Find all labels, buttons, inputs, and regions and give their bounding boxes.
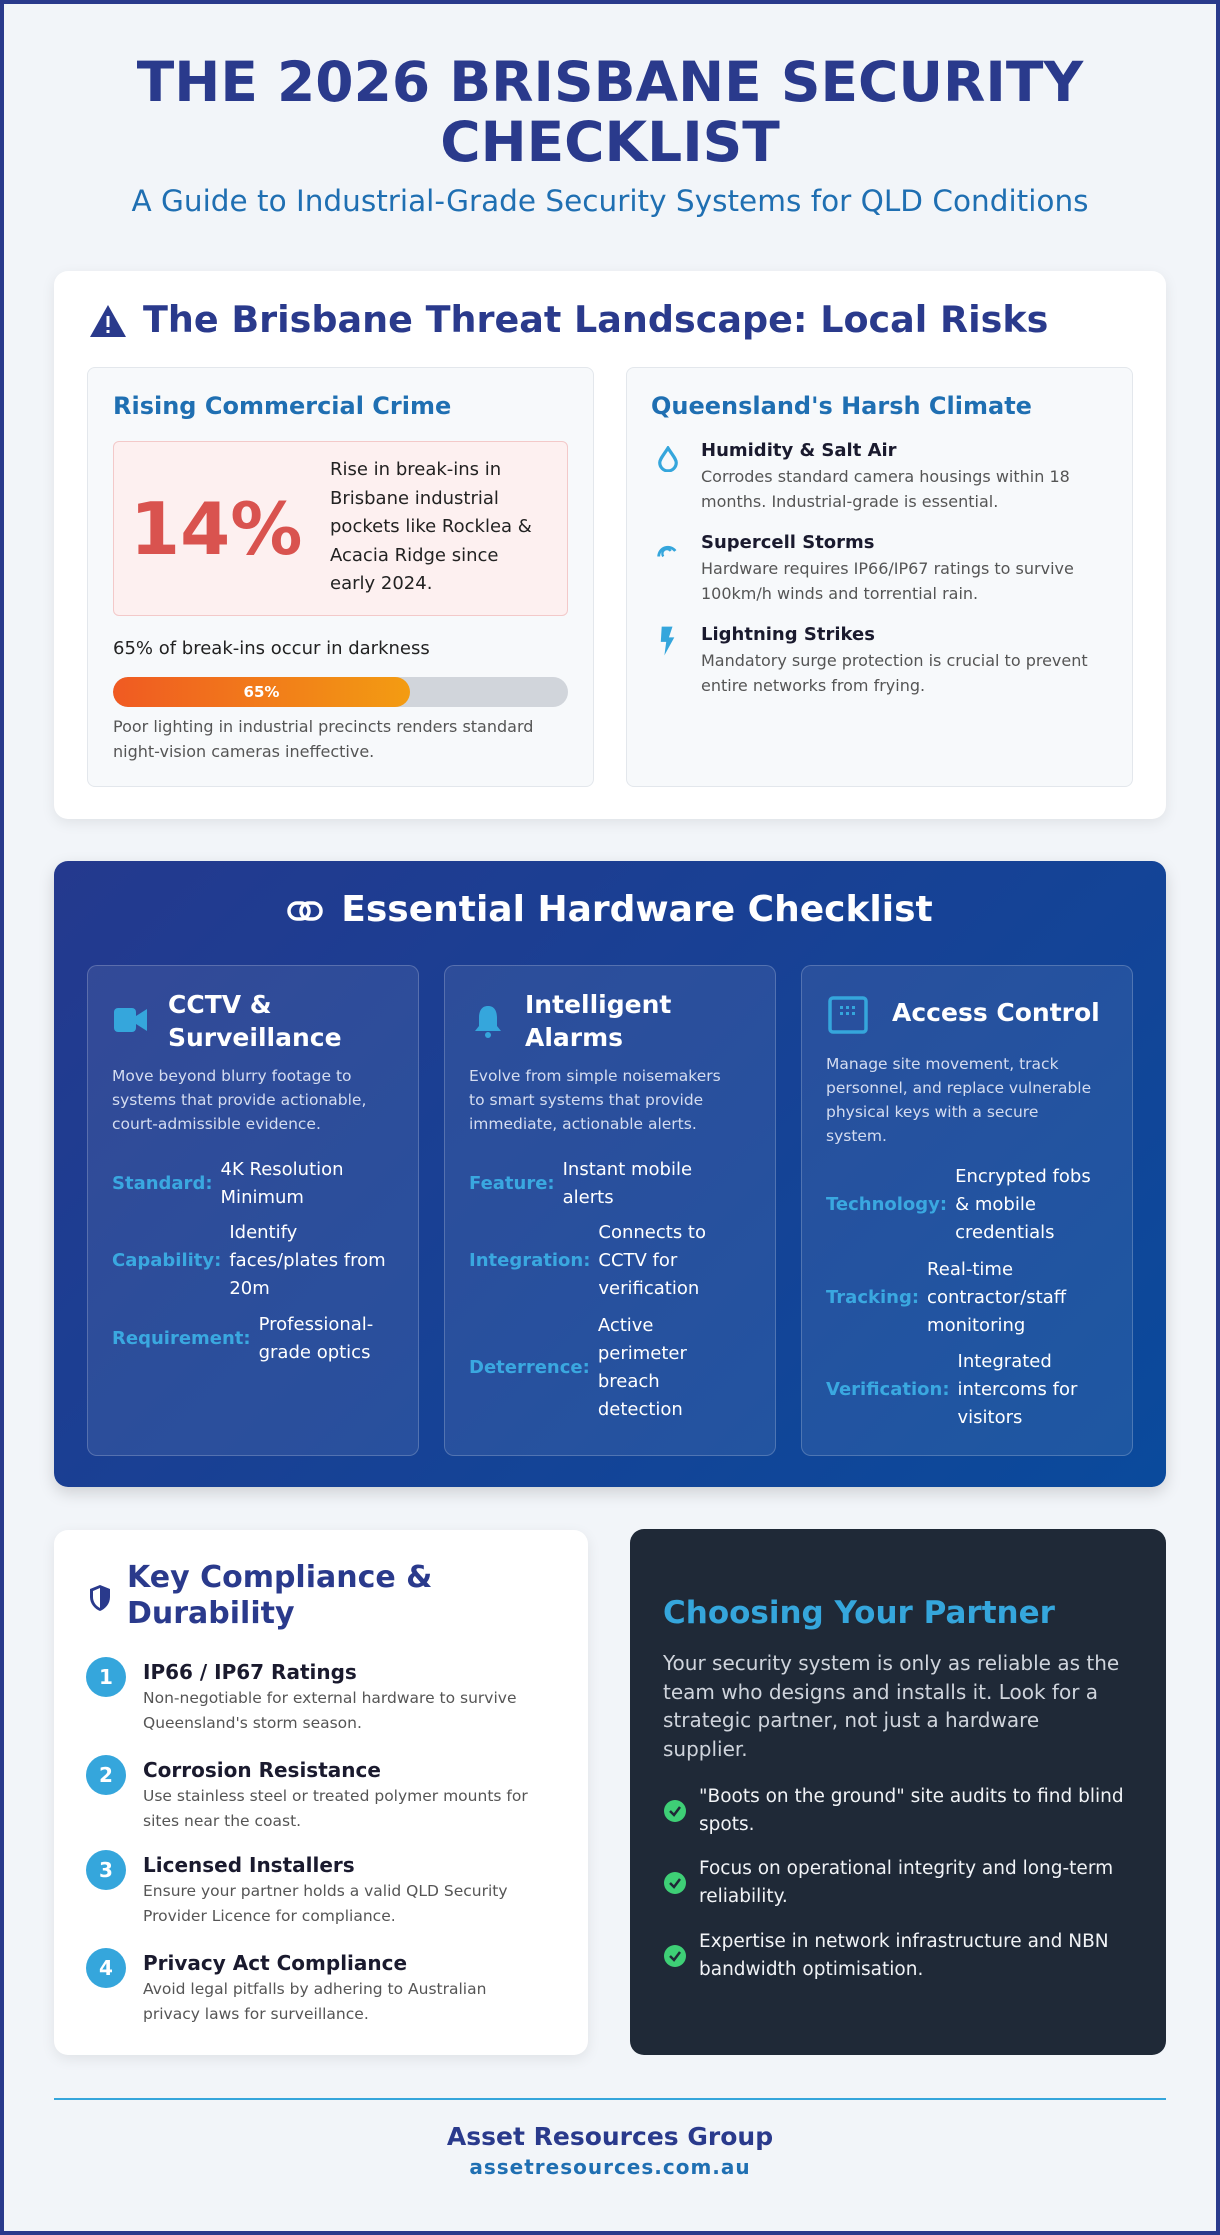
progress bar bbox=[113, 677, 568, 707]
heading: The Brisbane Threat Landscape: Local Risks bbox=[143, 298, 1048, 341]
card: alarms: Instant mobile alerts bbox=[563, 1159, 692, 1208]
compliance content: Corrosion Resistance bbox=[143, 1758, 381, 1782]
card: access control: Access Control bbox=[892, 998, 1100, 1027]
card: CCTV: Identify faces/plates from 20m bbox=[229, 1222, 386, 1299]
compliance content: 2 bbox=[99, 1763, 113, 1787]
card: alarms: Active perimeter breach detection bbox=[598, 1315, 687, 1420]
footer divider bbox=[54, 2098, 1166, 2100]
heading compliance bbox=[127, 1560, 432, 1631]
card: access control: Encrypted fobs & mobile credentials bbox=[955, 1166, 1091, 1243]
icon: warning bbox=[90, 305, 126, 337]
item: lightning: Mandatory surge protection is crucial to prevent entire networks from frying. bbox=[701, 651, 1088, 695]
progress bar: 65% bbox=[244, 683, 279, 701]
item: humidity bbox=[658, 440, 1070, 511]
icon: keypad bbox=[828, 996, 868, 1034]
card: CCTV: Requirement: bbox=[112, 1328, 251, 1349]
item: storms: Supercell Storms bbox=[701, 532, 875, 553]
compliance content: 4 bbox=[99, 1956, 113, 1980]
compliance content: 3 bbox=[99, 1858, 113, 1882]
icon: shield bbox=[90, 1585, 110, 1611]
card: access control bbox=[801, 965, 1133, 1456]
stat box: Rise in break-ins in Brisbane industrial pockets like Rocklea & Acacia Ridge since early 2024. bbox=[330, 459, 532, 594]
panel: threat landscape bbox=[54, 271, 1166, 819]
item: lightning: Lightning Strikes bbox=[701, 624, 875, 645]
card: CCTV: 4K Resolution Minimum bbox=[221, 1159, 344, 1208]
partner content: Choosing Your Partner bbox=[663, 1595, 1055, 1631]
title: CHECKLIST bbox=[440, 110, 780, 174]
compliance content: Licensed Installers bbox=[143, 1853, 355, 1877]
item: storms bbox=[657, 532, 1074, 603]
card: CCTV: Capability: bbox=[112, 1250, 221, 1271]
card: alarms: Feature: bbox=[469, 1173, 555, 1194]
sub-panel: climate bbox=[626, 367, 1133, 787]
card: CCTV: Professional-grade optics bbox=[259, 1314, 373, 1363]
card: alarms bbox=[444, 965, 776, 1456]
card: CCTV: Standard: bbox=[112, 1173, 213, 1194]
card: access control: Real-time contractor/staff monitoring bbox=[927, 1259, 1066, 1336]
card: CCTV bbox=[87, 965, 419, 1456]
compliance content: Privacy Act Compliance bbox=[143, 1951, 407, 1975]
icon: bell bbox=[475, 1006, 501, 1038]
panel: hardware checklist bbox=[54, 861, 1166, 1487]
card: alarms: Evolve from simple noisemakers to smart systems that provide immediate, actionable alerts. bbox=[469, 1067, 721, 1133]
card: access control: Technology: bbox=[826, 1194, 947, 1215]
footer: Asset Resources Group bbox=[447, 2122, 773, 2151]
compliance content: Use stainless steel or treated polymer mounts for sites near the coast. bbox=[143, 1787, 528, 1830]
partner content: Expertise in network infrastructure and NBN bandwidth optimisation. bbox=[699, 1931, 1109, 1980]
item: lightning bbox=[660, 624, 1088, 695]
heading crime: Rising Commercial Crime bbox=[113, 392, 451, 420]
card: alarms: Intelligent bbox=[525, 990, 671, 1019]
stat box bbox=[113, 441, 568, 616]
caption: Poor lighting in industrial precincts renders standard night-vision cameras ineffective. bbox=[113, 717, 533, 761]
card: CCTV: Move beyond blurry footage to systems that provide actionable, court-admissible evidence. bbox=[112, 1067, 366, 1133]
card: alarms: Connects to CCTV for verification bbox=[598, 1222, 706, 1299]
partner content: "Boots on the ground" site audits to find blind spots. bbox=[699, 1786, 1124, 1835]
partner content bbox=[663, 1595, 1124, 1980]
card: CCTV: Surveillance bbox=[168, 1023, 342, 1052]
card: access control: Verification: bbox=[826, 1379, 950, 1400]
panel: compliance bbox=[54, 1530, 588, 2055]
card: access control: Tracking: bbox=[826, 1287, 919, 1308]
heading climate: Queensland's Harsh Climate bbox=[651, 392, 1032, 420]
footer bbox=[447, 2122, 773, 2179]
heading compliance: Key Compliance & bbox=[127, 1560, 432, 1595]
heading compliance: Durability bbox=[127, 1596, 295, 1631]
card: alarms: Deterrence: bbox=[469, 1357, 590, 1378]
footer: assetresources.com.au bbox=[469, 2155, 751, 2179]
compliance content: IP66 / IP67 Ratings bbox=[143, 1660, 357, 1684]
card: access control: Manage site movement, track personnel, and replace vulnerable physical keys with a secure system. bbox=[826, 1055, 1091, 1145]
card: access control: Integrated intercoms for visitors bbox=[958, 1351, 1077, 1428]
compliance content: Non-negotiable for external hardware to survive Queensland's storm season. bbox=[143, 1689, 516, 1732]
card: CCTV: CCTV & bbox=[168, 990, 272, 1019]
sub-panel: crime bbox=[87, 367, 594, 787]
item: storms: Hardware requires IP66/IP67 ratings to survive 100km/h winds and torrential rain. bbox=[701, 559, 1074, 603]
compliance content: Ensure your partner holds a valid QLD Security Provider Licence for compliance. bbox=[143, 1882, 508, 1925]
heading hardware: Essential Hardware Checklist bbox=[341, 889, 933, 930]
partner content: Your security system is only as reliable as the team who designs and installs it. Look for a strategic partner, not just a hardware supplier. bbox=[663, 1651, 1119, 1760]
stat box: 14% bbox=[130, 487, 302, 571]
subtitle: A Guide to Industrial-Grade Security Systems for QLD Conditions bbox=[131, 184, 1089, 218]
card: alarms: Integration: bbox=[469, 1250, 590, 1271]
title: THE 2026 BRISBANE SECURITY bbox=[137, 50, 1083, 114]
compliance content: 1 bbox=[99, 1665, 113, 1689]
panel: choosing partner bbox=[630, 1529, 1166, 2055]
compliance content: Avoid legal pitfalls by adhering to Australian privacy laws for surveillance. bbox=[143, 1980, 486, 2023]
card: alarms: Alarms bbox=[525, 1023, 623, 1052]
title bbox=[137, 50, 1084, 174]
item: humidity: Humidity & Salt Air bbox=[701, 440, 897, 461]
partner content: Focus on operational integrity and long-term reliability. bbox=[699, 1858, 1113, 1907]
item: humidity: Corrodes standard camera housings within 18 months. Industrial-grade is essential. bbox=[701, 467, 1070, 511]
icon: camera bbox=[114, 1008, 147, 1032]
compliance content bbox=[86, 1560, 528, 2023]
bar label: 65% of break-ins occur in darkness bbox=[113, 638, 430, 659]
